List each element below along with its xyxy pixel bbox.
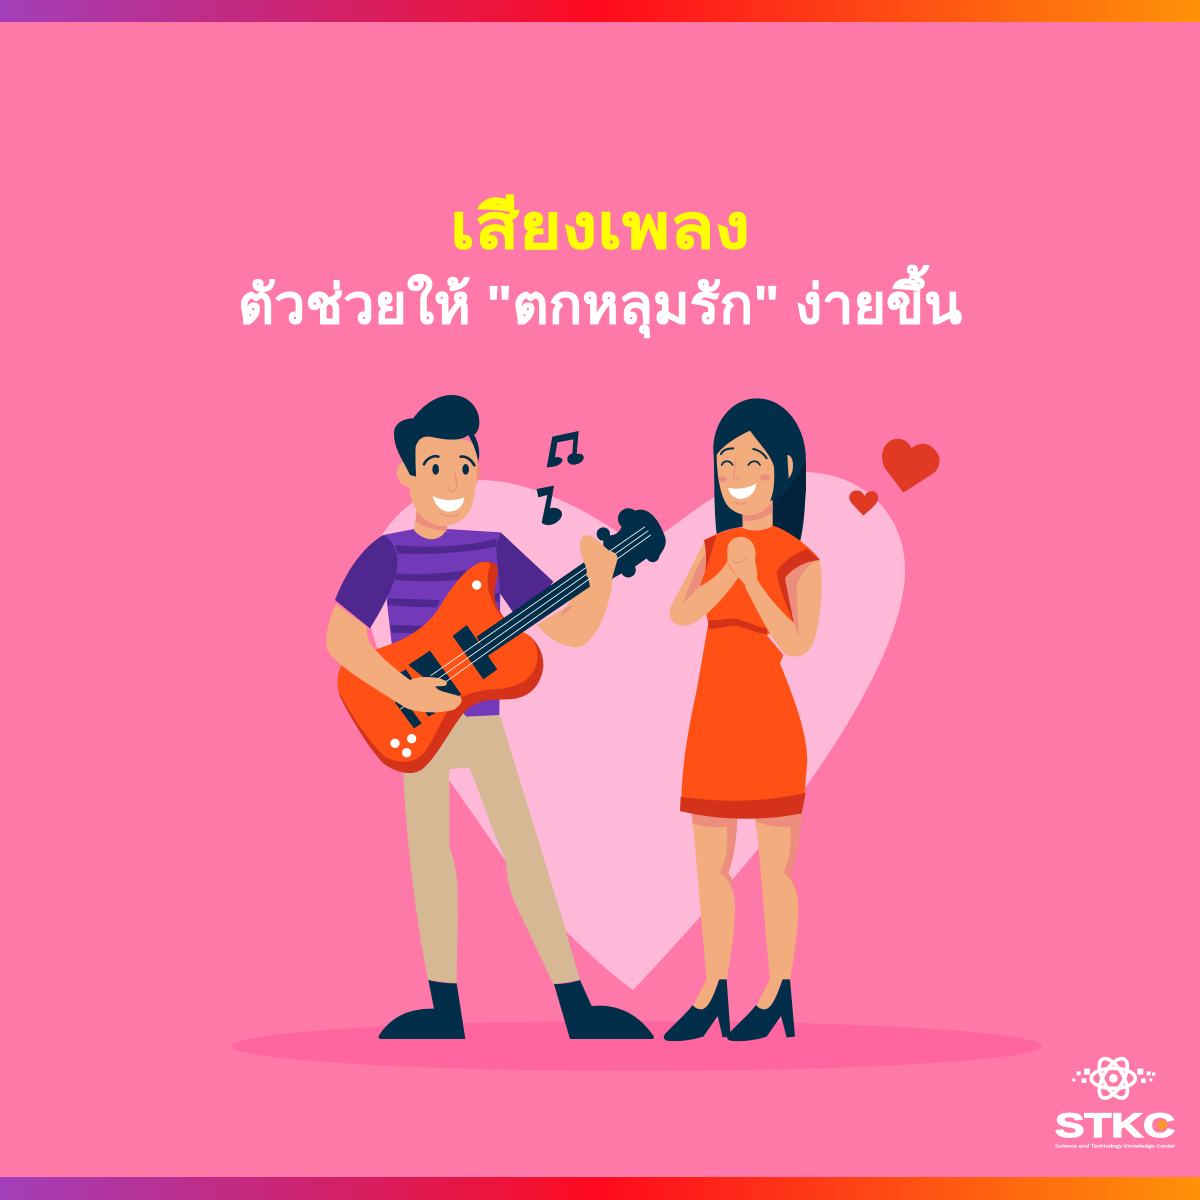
trousers xyxy=(402,715,580,984)
guitar neck xyxy=(477,562,590,657)
ear xyxy=(787,455,793,478)
left arm xyxy=(670,542,738,626)
right shoe xyxy=(554,980,654,1039)
eyebrows xyxy=(424,456,474,465)
nose xyxy=(449,473,457,492)
neck shadow xyxy=(415,511,447,532)
right arm shading xyxy=(785,561,816,637)
title line 2: ตัวช่วยให้ "ตกหลุมรัก" ง่ายขึ้น xyxy=(238,265,962,339)
pixel squares xyxy=(1072,1069,1155,1083)
hair parting xyxy=(746,421,752,431)
facial features xyxy=(424,456,474,516)
ears xyxy=(397,462,415,488)
neck xyxy=(742,500,773,530)
clasped hands xyxy=(727,537,757,587)
face xyxy=(410,436,477,526)
face xyxy=(717,431,774,515)
chin line xyxy=(441,513,459,516)
nose xyxy=(733,458,740,479)
large pale heart backdrop xyxy=(366,472,905,990)
guitar knobs xyxy=(390,580,481,757)
atom emblem xyxy=(1091,1054,1135,1102)
orbit two xyxy=(1094,1054,1133,1102)
orbit one xyxy=(1091,1068,1135,1088)
facial features xyxy=(718,448,770,504)
guitar xyxy=(338,508,666,773)
eyes xyxy=(432,464,469,475)
ground shadow xyxy=(232,1021,1042,1071)
hair xyxy=(394,395,479,477)
man lower body xyxy=(378,715,654,1039)
left sleeve trim xyxy=(704,535,717,572)
neck shadow xyxy=(742,502,773,521)
guitar body shadow xyxy=(338,562,543,773)
left high heel xyxy=(664,979,731,1041)
left leg xyxy=(693,823,735,1009)
bottom gradient bar xyxy=(0,1177,1200,1200)
orange dot xyxy=(1157,1120,1167,1130)
left shoe xyxy=(378,980,465,1039)
STKC logo xyxy=(1055,1054,1175,1149)
eyebrows xyxy=(721,448,767,458)
smiling eyes xyxy=(722,461,760,465)
woman lower body xyxy=(664,813,802,1041)
smile xyxy=(728,483,756,499)
top gradient bar xyxy=(0,0,1200,22)
right leg xyxy=(756,822,798,1009)
cheeks xyxy=(718,475,770,482)
left arm and strumming hand xyxy=(326,604,462,712)
title line 1: เสียงเพลง xyxy=(450,193,750,262)
elbow fold xyxy=(560,606,573,617)
back hair xyxy=(713,398,806,542)
right ear shade xyxy=(477,465,481,483)
orbit three xyxy=(1094,1054,1133,1102)
smile xyxy=(433,496,464,512)
title xyxy=(238,193,962,339)
left sleeve xyxy=(335,535,397,628)
guitar strings xyxy=(394,527,651,709)
guitar headstock xyxy=(603,508,666,579)
woman dress hem xyxy=(680,793,806,819)
guitar tuning peg xyxy=(597,527,610,541)
nucleus xyxy=(1109,1074,1118,1083)
chin line xyxy=(736,502,746,504)
music note: rest xyxy=(537,486,562,525)
STKC wordmark: STKC xyxy=(1055,1107,1175,1145)
large red heart xyxy=(882,439,940,493)
hem band xyxy=(680,793,806,819)
right arm xyxy=(745,560,822,656)
right high heel xyxy=(727,979,795,1041)
man upper body xyxy=(326,395,666,773)
guitar body xyxy=(338,562,537,762)
right sleeve xyxy=(496,532,553,620)
right arm xyxy=(537,567,613,647)
waist band xyxy=(708,619,767,634)
neck xyxy=(414,507,448,539)
shirt stripes xyxy=(388,538,499,633)
hair shadow xyxy=(773,462,806,542)
leg shading xyxy=(692,813,802,897)
fretting hand xyxy=(580,535,618,583)
finger fold xyxy=(733,558,748,562)
small red heart xyxy=(849,490,878,516)
tagline: Science and Technology Knowledge Center xyxy=(1055,1143,1175,1149)
woman upper body xyxy=(670,398,940,802)
right sleeve trim xyxy=(777,548,820,623)
music note: beamed xyxy=(547,431,584,467)
shirt xyxy=(383,529,501,717)
left arm shading xyxy=(683,553,705,603)
guitar pickups xyxy=(389,625,497,728)
dress bodice and skirt xyxy=(681,526,820,802)
